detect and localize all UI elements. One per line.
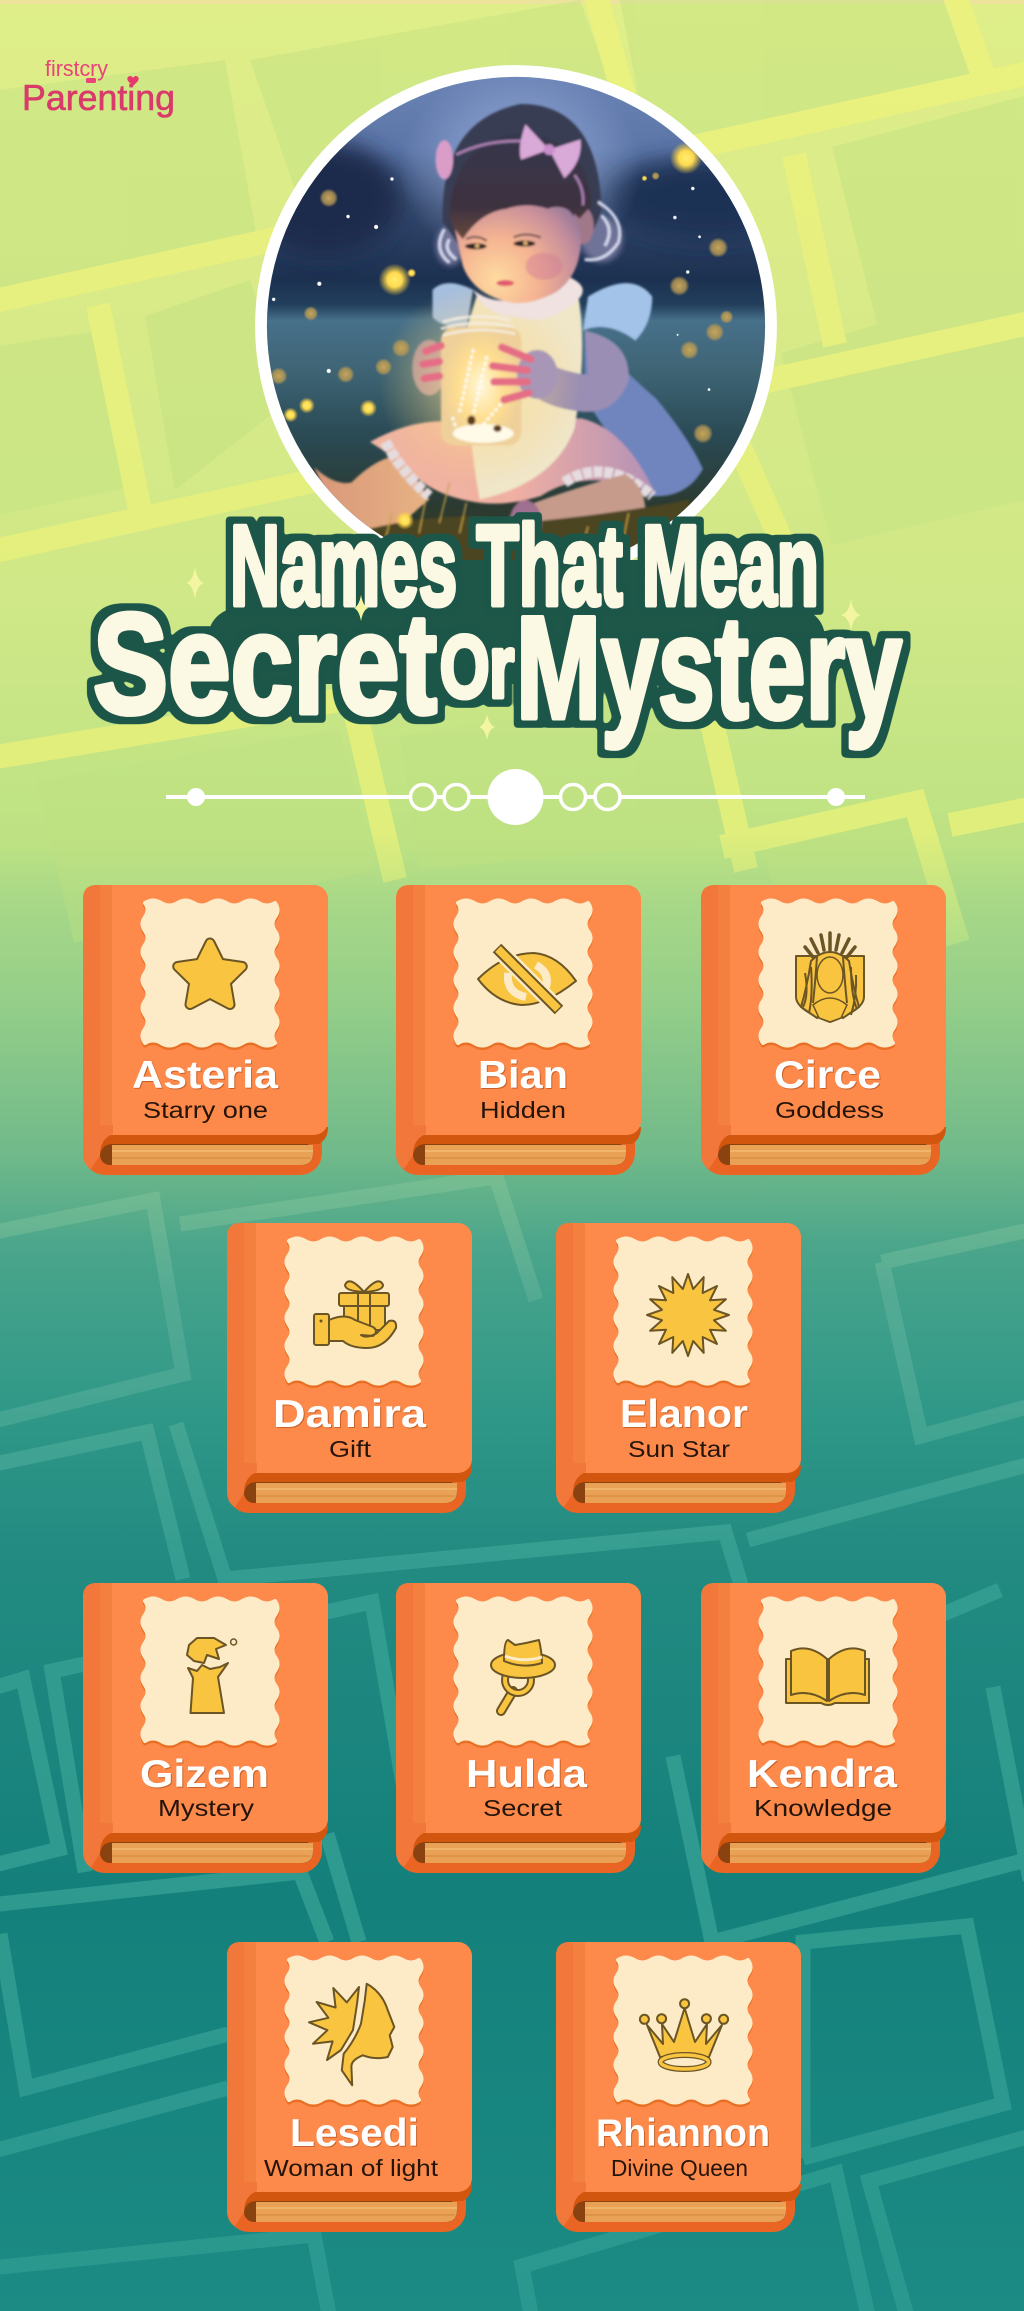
meaning: Mystery (158, 1795, 255, 1821)
book: Circe (701, 885, 946, 1175)
hero photo: baby with firefly jar (255, 65, 777, 560)
book: Asteria (83, 885, 328, 1175)
title text (93, 503, 902, 749)
logo: FirstCry Parenting: Parenting (22, 77, 175, 118)
book: Lesedi (227, 1942, 472, 2232)
meaning: Starry one (143, 1097, 268, 1123)
meaning: Sun Star (628, 1436, 730, 1462)
meaning: Knowledge (754, 1795, 892, 1821)
icon: open book (786, 1648, 869, 1705)
title text: Or (440, 617, 514, 716)
book: Kendra (701, 1583, 946, 1873)
book: Elanor (556, 1223, 801, 1513)
icon: crossed eye (478, 948, 576, 1010)
name: Rhiannon (596, 2112, 770, 2155)
name: Asteria (132, 1054, 278, 1097)
logo: FirstCry Parenting: firstcry (45, 56, 108, 81)
name: Circe (774, 1054, 881, 1097)
icon: sun (647, 1274, 729, 1356)
icon: star (178, 943, 242, 1004)
book: Rhiannon (556, 1942, 801, 2232)
title banner (93, 503, 902, 749)
meaning: Goddess (775, 1097, 884, 1123)
book: Hulda (396, 1583, 641, 1873)
sparkles (186, 567, 861, 740)
name: Bian (478, 1054, 568, 1097)
name: Lesedi (290, 2112, 419, 2155)
meaning: Hidden (480, 1097, 566, 1123)
meaning: Divine Queen (611, 2155, 748, 2181)
book: Gizem (83, 1583, 328, 1873)
name: Gizem (140, 1753, 269, 1796)
meaning: Woman of light (264, 2155, 439, 2181)
meaning: Secret (483, 1795, 563, 1821)
divider (166, 769, 865, 825)
icon: gift in hand (314, 1281, 396, 1348)
book: Bian (396, 885, 641, 1175)
icon: broken tower (187, 1638, 237, 1713)
name: Kendra (747, 1753, 897, 1796)
icon: goddess crest (796, 933, 864, 1022)
name: Hulda (466, 1753, 587, 1796)
meaning: Gift (329, 1436, 372, 1462)
name: Elanor (620, 1393, 748, 1436)
icon: sun and woman profile (309, 1984, 394, 2085)
book: Damira (227, 1223, 472, 1513)
icon: crown (640, 1999, 728, 2069)
name: Damira (273, 1393, 426, 1436)
fireflies (270, 142, 733, 530)
icon: hat and magnifier (491, 1640, 555, 1711)
logo: FirstCry Parenting (22, 56, 175, 118)
title text: Secret (93, 585, 437, 744)
